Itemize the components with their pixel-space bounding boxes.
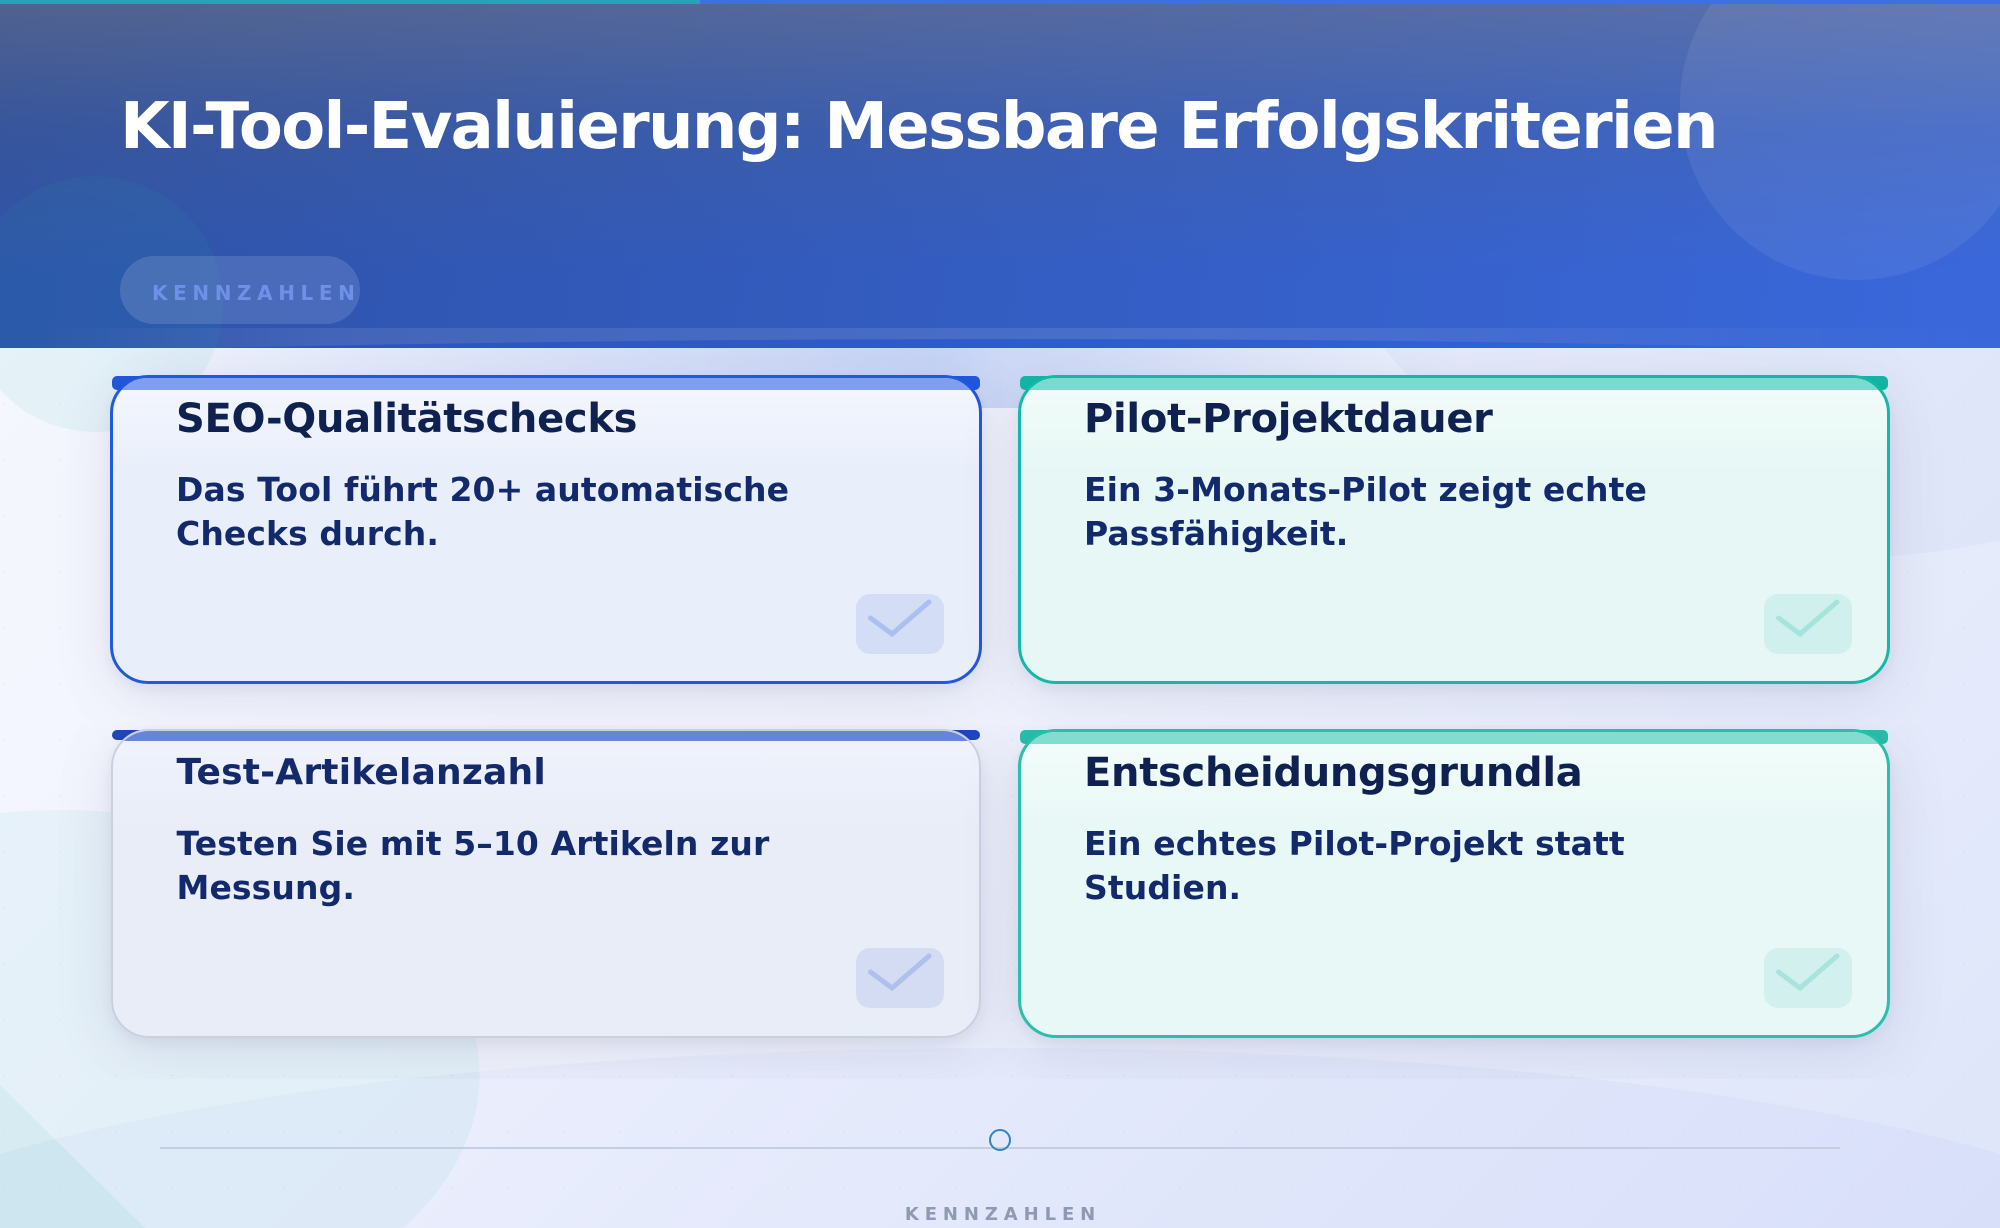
- body text: [176, 470, 789, 552]
- decorative teal circle: [0, 176, 223, 432]
- card row 2: [99, 726, 1902, 1062]
- card: Pilot-Projektdauer: [1006, 372, 1902, 708]
- top progress bar: [0, 0, 2000, 4]
- badge pill: KENNZAHLEN: [152, 281, 360, 305]
- heading: Entscheidungsgrundla: [1084, 750, 1582, 796]
- body text: Messung.: [176, 868, 355, 907]
- body text: Studien.: [1084, 868, 1241, 906]
- body text: Ein 3-Monats-Pilot zeigt echte: [1084, 470, 1647, 508]
- header panel: [0, 0, 2000, 348]
- footer label: KENNZAHLEN: [905, 1204, 1101, 1225]
- body text: Checks durch.: [176, 514, 439, 552]
- body text: Ein echtes Pilot-Projekt statt: [1084, 824, 1625, 862]
- badge pill: [120, 256, 360, 324]
- body text: [176, 824, 770, 907]
- icon: check: [856, 948, 944, 1008]
- heading: Pilot-Projektdauer: [1084, 396, 1493, 442]
- footer divider with marker: [160, 1129, 1840, 1151]
- icon: check: [1764, 594, 1852, 654]
- heading: Test-Artikelanzahl: [176, 752, 546, 793]
- body text: [1084, 470, 1647, 552]
- card: Test-Artikelanzahl: [99, 726, 993, 1062]
- icon: check: [1764, 948, 1852, 1008]
- body text: Passfähigkeit.: [1084, 514, 1348, 552]
- card row 1: [98, 372, 1902, 708]
- card: SEO-Qualitätschecks: [98, 372, 994, 708]
- body text: [1084, 824, 1625, 906]
- body text: Das Tool führt 20+ automatische: [176, 470, 789, 508]
- icon: check: [856, 594, 944, 654]
- heading: SEO-Qualitätschecks: [176, 396, 637, 442]
- title: KI-Tool-Evaluierung: Messbare Erfolgskriterien: [120, 90, 1717, 164]
- body text: Testen Sie mit 5–10 Artikeln zur: [176, 824, 769, 863]
- card: Entscheidungsgrundla: [1006, 726, 1902, 1062]
